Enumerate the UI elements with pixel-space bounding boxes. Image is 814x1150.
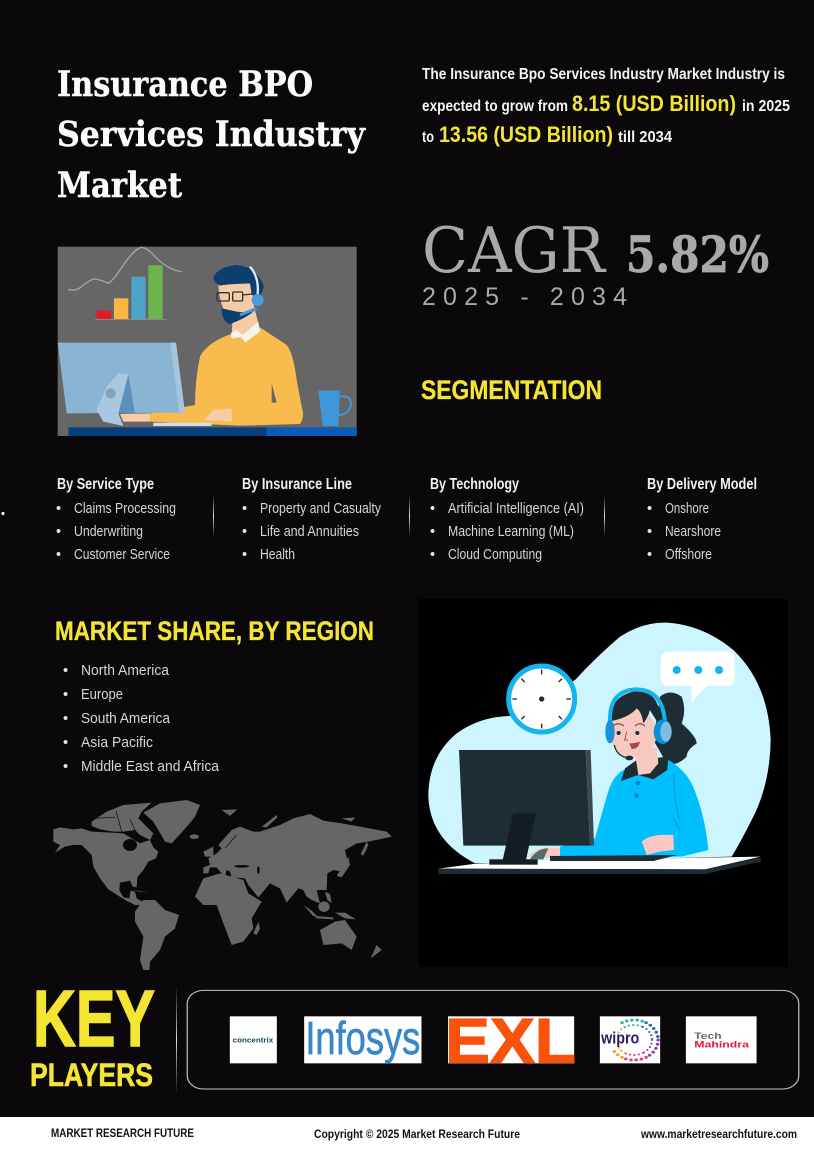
footer bar: MARKET RESEARCH FUTURE <box>51 1126 194 1140</box>
segment column: by technology: Machine Learning (ML) <box>448 524 574 540</box>
segment column: by delivery model: • <box>647 524 652 540</box>
key players heading <box>30 974 155 1093</box>
segment column: by delivery model: By Delivery Model <box>647 476 757 493</box>
market growth summary text: till 2034 <box>618 129 672 146</box>
segment column: by insurance line <box>242 476 382 563</box>
market growth summary text: in 2025 <box>742 98 790 115</box>
segment column: by technology <box>430 476 584 563</box>
segment column: by technology: Artificial Intelligence (AI) <box>448 501 584 517</box>
footer bar: Copyright © 2025 Market Research Future <box>314 1127 520 1141</box>
CAGR figure: CAGR <box>422 214 606 287</box>
world map <box>53 800 392 970</box>
segment column: by technology: • <box>430 501 435 517</box>
segment column: by service type: Underwriting <box>74 524 143 540</box>
segment column: by delivery model: Onshore <box>665 501 709 517</box>
small stray dot <box>1 512 5 515</box>
logo: wipro: wipro <box>600 1028 639 1047</box>
logo: Infosys: Infosys <box>305 1012 420 1064</box>
segment column: by service type: • <box>56 524 61 540</box>
segment column: by technology: • <box>430 547 435 563</box>
region list: South America <box>81 711 171 727</box>
market growth summary text: 8.15 (USD Billion) <box>572 91 736 116</box>
CAGR figure <box>422 214 769 311</box>
segment column: by service type: • <box>56 501 61 517</box>
region list: Asia Pacific <box>81 735 153 751</box>
market growth summary text: to <box>422 129 434 146</box>
logo: wipro <box>600 1016 660 1063</box>
segment column: by service type <box>56 476 176 563</box>
logo: concentrix <box>230 1016 277 1063</box>
title: Services Industry <box>57 114 366 155</box>
segment column: by technology: Cloud Computing <box>448 547 542 563</box>
market growth summary text <box>422 66 790 147</box>
illustration: woman call-centre agent <box>419 599 788 967</box>
region list: • <box>63 663 68 679</box>
segment column: by delivery model: Offshore <box>665 547 712 563</box>
segment column: by insurance line: • <box>242 547 247 563</box>
logo: Tech Mahindra <box>686 1016 757 1063</box>
segment column: by delivery model: Nearshore <box>665 524 721 540</box>
segment column: by delivery model: • <box>647 547 652 563</box>
key players logo panel <box>187 990 799 1089</box>
market growth summary text: 13.56 (USD Billion) <box>439 122 613 147</box>
segment column: by technology: • <box>430 524 435 540</box>
region list <box>63 663 220 775</box>
region list: • <box>63 735 68 751</box>
segment column: by service type: Claims Processing <box>74 501 176 517</box>
footer bar <box>0 1117 814 1150</box>
segment column: by insurance line: • <box>242 524 247 540</box>
segment column: by delivery model: • <box>647 501 652 517</box>
segment column: by insurance line: Health <box>260 547 295 563</box>
logo: EXL: EXL <box>445 1006 576 1076</box>
region list: North America <box>81 663 170 679</box>
region list: Middle East and Africa <box>81 759 220 775</box>
segment column: by service type: • <box>56 547 61 563</box>
segment column: by technology: By Technology <box>430 476 519 493</box>
CAGR figure: 5.82% <box>626 225 769 284</box>
market growth summary text: expected to grow from <box>422 98 568 115</box>
segment column: by insurance line: Property and Casualty <box>260 501 382 517</box>
region list: • <box>63 687 68 703</box>
key players heading: KEY <box>33 974 155 1063</box>
region list: • <box>63 759 68 775</box>
illustration: man at computer with headset <box>58 247 357 436</box>
heading: market share by region: MARKET SHARE, BY REGION <box>55 616 374 646</box>
logo: concentrix: concentrix <box>233 1035 273 1044</box>
heading: segmentation: SEGMENTATION <box>421 375 602 405</box>
region list: • <box>63 711 68 727</box>
CAGR figure: 2025 - 2034 <box>422 283 627 311</box>
title <box>57 64 366 206</box>
segment column: by insurance line: • <box>242 501 247 517</box>
logo: Tech Mahindra: Tech <box>694 1032 722 1042</box>
title: Market <box>57 165 182 206</box>
segment column: by service type: Customer Service <box>74 547 170 563</box>
title: Insurance BPO <box>57 64 313 105</box>
segment column: by insurance line: Life and Annuities <box>260 524 359 540</box>
region list: Europe <box>81 687 123 703</box>
segment column: by service type: By Service Type <box>57 476 154 493</box>
segment column: by insurance line: By Insurance Line <box>242 476 352 493</box>
logo: Infosys <box>304 1012 421 1064</box>
logo: Tech Mahindra: Mahindra <box>694 1040 750 1050</box>
key players heading: PLAYERS <box>30 1057 153 1093</box>
segment column: by delivery model <box>647 476 757 563</box>
